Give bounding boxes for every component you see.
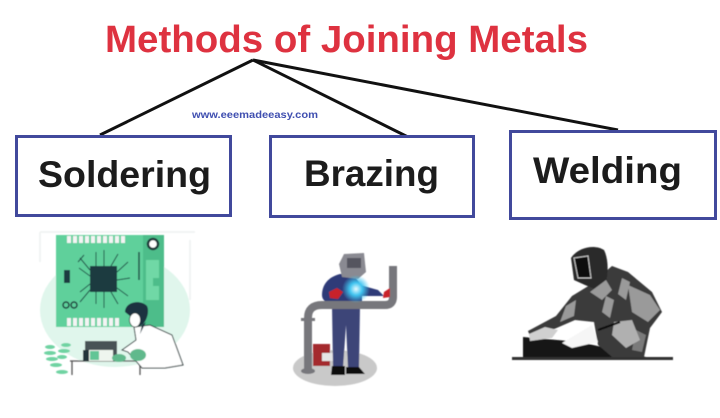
- website url: www.eeemadeeasy.com: [191, 109, 318, 121]
- box: Welding: [510, 132, 716, 218]
- box: Soldering: Soldering: [38, 154, 211, 195]
- gas cylinder box: [313, 344, 334, 366]
- legs: [332, 305, 360, 368]
- technician: [112, 302, 183, 368]
- box: Brazing: [270, 136, 474, 216]
- microchip: [90, 266, 117, 292]
- gloves: [529, 327, 558, 341]
- illustration: welder silhouette: [512, 247, 673, 360]
- shoes: [331, 366, 365, 375]
- box: Soldering: [16, 136, 230, 216]
- desk: [70, 361, 143, 375]
- plant: [44, 343, 71, 374]
- welding spark: [342, 275, 370, 303]
- red gloves: [329, 288, 390, 299]
- torso: [322, 274, 384, 306]
- welding helmet: [571, 247, 612, 300]
- connector lines from title to the three methods: [100, 60, 618, 137]
- body: [528, 266, 662, 357]
- box: Welding: Welding: [533, 150, 682, 191]
- torch and arc: [562, 325, 598, 348]
- floor shadow: [293, 350, 377, 386]
- laptop: [83, 341, 117, 361]
- pipe: [308, 266, 393, 371]
- helmet: [339, 253, 366, 279]
- circuit board: [56, 235, 164, 327]
- illustration: brazing worker with pipe: [293, 253, 393, 386]
- workpiece: [523, 337, 646, 357]
- box: Brazing: Brazing: [304, 153, 439, 194]
- illustration: soldering circuit board and technician: [40, 232, 195, 375]
- workbench line: [512, 357, 673, 360]
- jacket highlights: [560, 278, 660, 322]
- title: Methods of Joining Metals: [105, 19, 588, 61]
